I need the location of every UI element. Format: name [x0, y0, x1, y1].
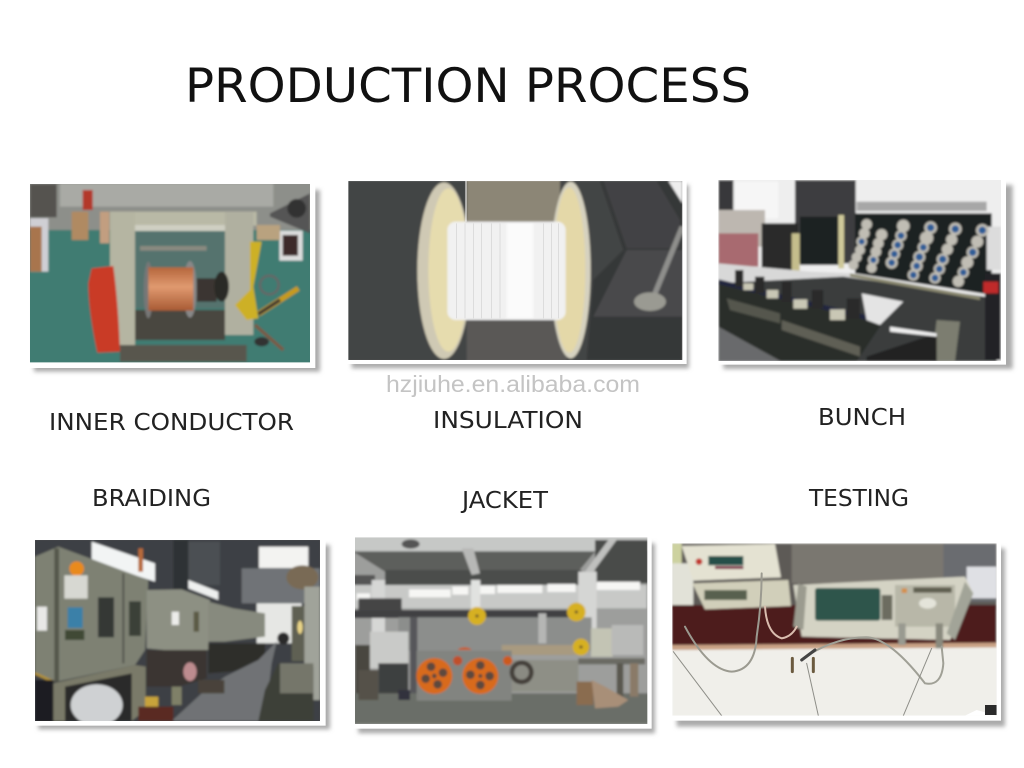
- label: inner conductor: INNER CONDUCTOR: [49, 410, 294, 436]
- photo panel: jacket: [350, 533, 655, 733]
- photo panel: inner conductor: [25, 178, 320, 372]
- label: braiding: BRAIDING: [92, 486, 211, 512]
- photo panel: bunch: [714, 175, 1013, 369]
- photo panel: braiding: [30, 534, 330, 729]
- label: testing: TESTING: [808, 486, 909, 512]
- label: bunch: BUNCH: [818, 405, 906, 431]
- photo panel: testing: [668, 537, 1005, 727]
- label: jacket: JACKET: [460, 488, 549, 514]
- label: insulation: INSULATION: [433, 408, 583, 434]
- watermark: hzjiuhe.en.alibaba.com: [386, 371, 640, 397]
- photo panel: insulation spool: [343, 175, 689, 368]
- title: PRODUCTION PROCESS: [185, 59, 751, 114]
